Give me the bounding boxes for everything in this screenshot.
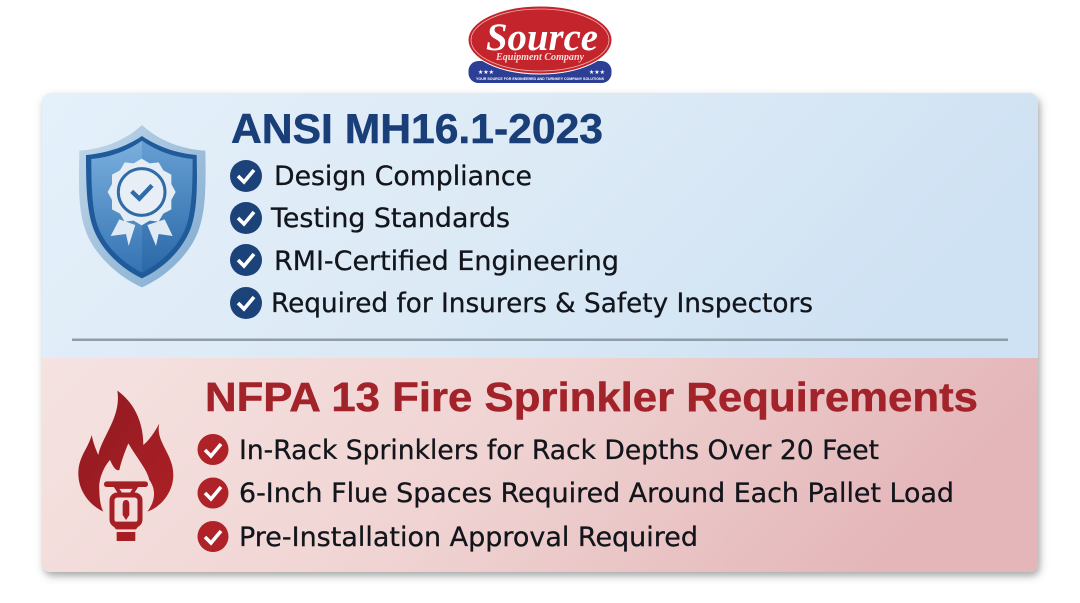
item: Testing Standards: Testing Standards — [270, 203, 510, 234]
main card — [42, 93, 1038, 572]
panel: ANSI MH16.1-2023 — [42, 93, 1038, 358]
item: Pre-Installation Approval: Pre-Installation Approval Required — [239, 522, 698, 553]
item: RMI-Certified Engineering: RMI-Certified Engineering — [274, 246, 619, 277]
item: Required for Insurers & Safety Inspectors: Required for Insurers & Safety Inspectors — [271, 288, 813, 319]
panel: NFPA 13 Fire Sprinkler Requirements — [42, 358, 1038, 572]
logo: Source Equipment Company — [468, 6, 612, 83]
icon: flame with sprinkler head — [78, 391, 173, 541]
logo: Source Equipment Company: ★★★ — [589, 69, 605, 76]
item: In-Rack Sprinklers: In-Rack Sprinklers for Rack Depths Over 20 Feet — [239, 435, 879, 466]
icon: shield with award badge — [79, 125, 206, 287]
heading: NFPA 13 Fire Sprinkler Requirements: NFPA 13 Fire Sprinkler Requirements — [205, 374, 978, 420]
item: Design Compliance: Design Compliance — [274, 161, 532, 192]
logo: Source Equipment Company: ★★★ — [478, 69, 494, 76]
logo: Source Equipment Company: Equipment Company — [495, 52, 585, 63]
logo: Source Equipment Company: Source — [486, 16, 598, 59]
heading: ANSI MH16.1-2023: ANSI MH16.1-2023 — [231, 105, 603, 152]
logo: Source Equipment Company: YOUR SOURCE FOR ENGINEERED AND TURNKEY COMPANY SOLUTIONS — [476, 76, 604, 81]
item: 6-Inch Flue Spaces: 6-Inch Flue Spaces Required Around Each Pallet Load — [239, 478, 954, 509]
